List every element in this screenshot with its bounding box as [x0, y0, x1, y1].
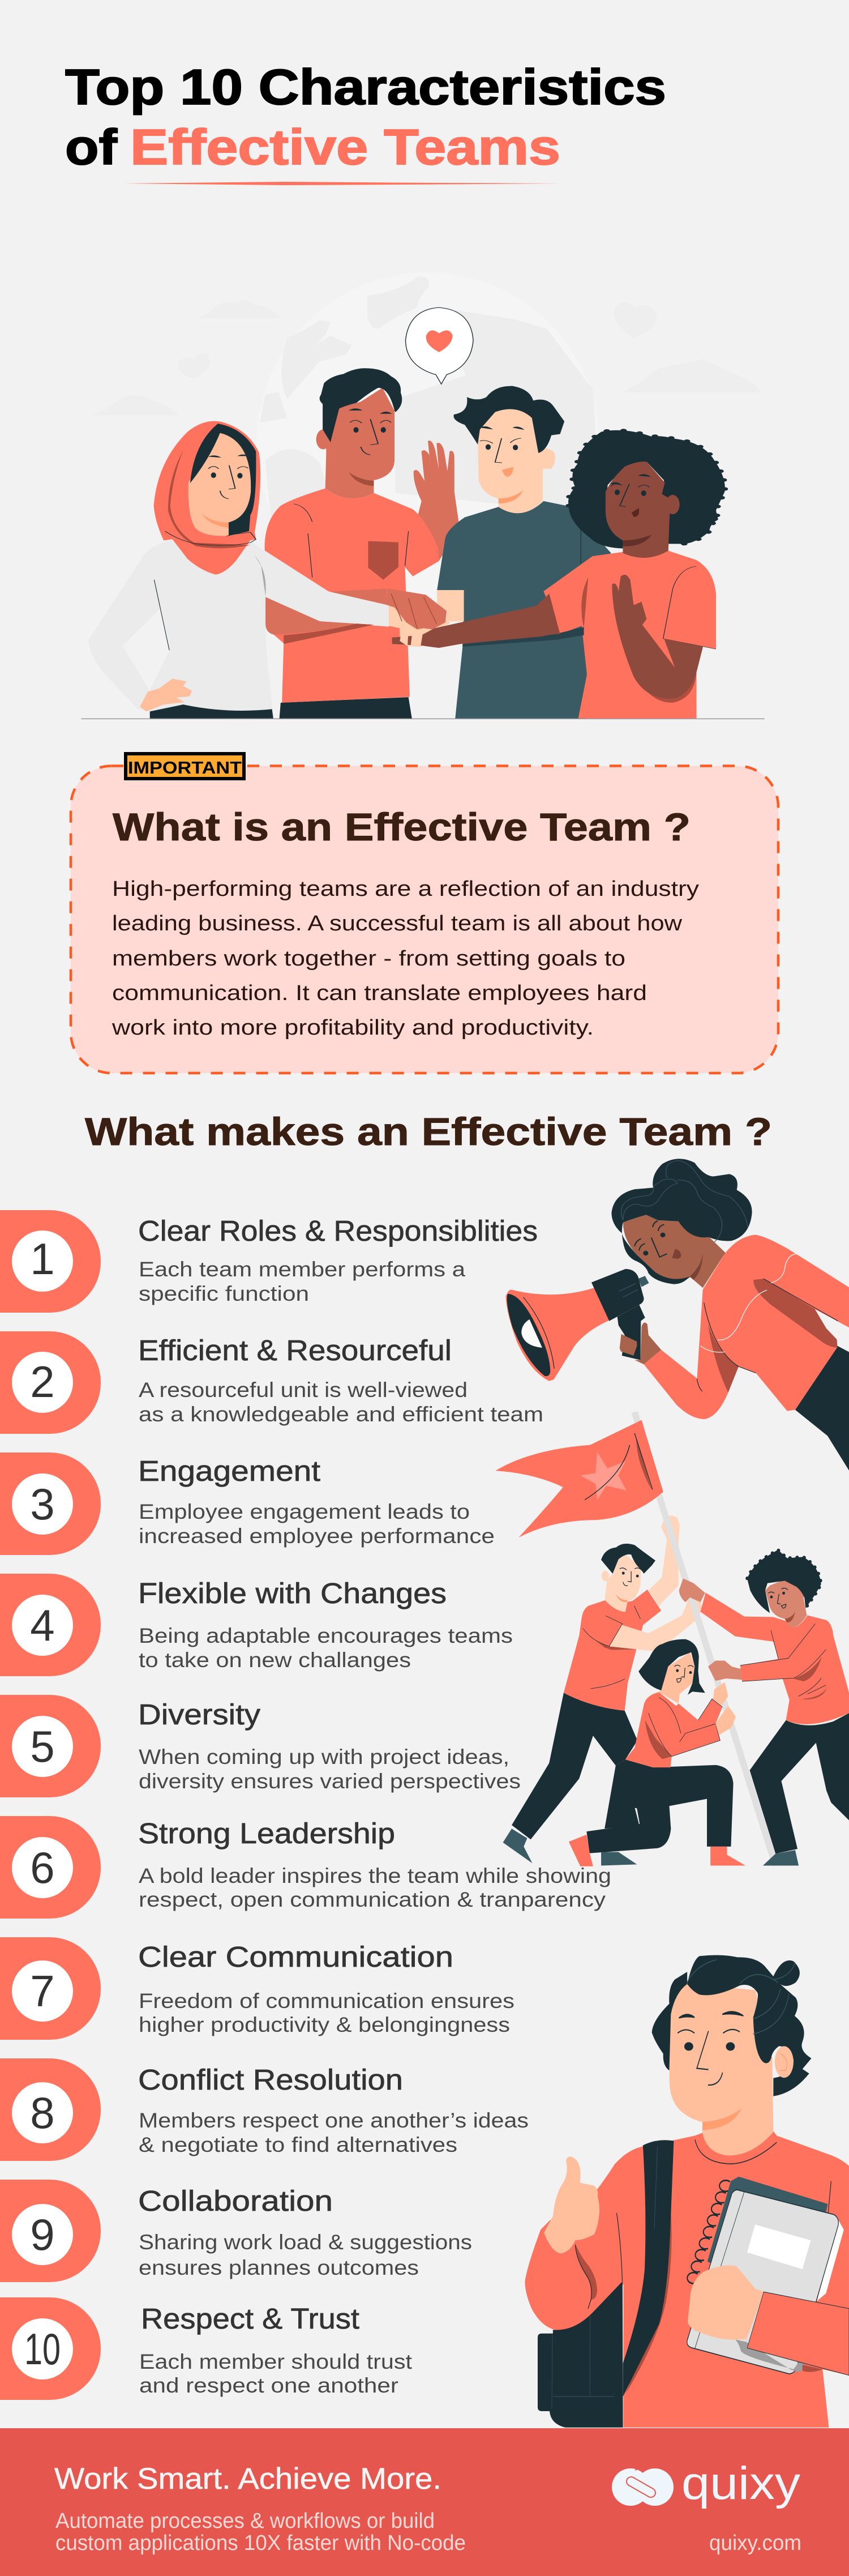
list item 8: Members respect one another’s ideas	[139, 2109, 529, 2132]
title: of	[65, 119, 118, 175]
list item 8	[0, 2058, 529, 2161]
man right	[679, 1550, 849, 1865]
list item 3: increased employee performance	[139, 1524, 495, 1548]
flag pole	[659, 1495, 775, 1865]
footer text	[55, 2509, 466, 2555]
list item 3	[0, 1453, 495, 1555]
footer tagline: Work Smart. Achieve More.	[54, 2462, 441, 2496]
list item 4: Being adaptable encourages teams	[139, 1624, 513, 1647]
person 4: curly hair woman	[462, 430, 725, 719]
badge: important: IMPORTANT	[128, 758, 242, 778]
badge: important	[126, 754, 244, 779]
list item 5: When coming up with project ideas,	[139, 1745, 509, 1768]
list item 5: Diversity	[138, 1698, 261, 1731]
list item 2: 2	[30, 1357, 55, 1407]
panel text: members work together - from setting goals to	[112, 947, 625, 971]
panel text: leading business. A successful team is all about how	[112, 912, 683, 935]
list item 9: Collaboration	[138, 2185, 333, 2217]
list item 10: Respect & Trust	[141, 2302, 359, 2335]
woman kneeling	[569, 1639, 745, 1866]
list item 8: & negotiate to find alternatives	[139, 2133, 457, 2156]
background clouds and hearts	[91, 300, 761, 415]
ground line	[81, 718, 765, 719]
student head and hair	[652, 1955, 812, 2155]
list item 4: to take on new challanges	[139, 1648, 411, 1672]
list item 10: Each member should trust	[139, 2350, 413, 2373]
person 3: teal shirt	[437, 386, 611, 719]
title	[65, 59, 666, 185]
student thumbs up hand	[544, 2156, 599, 2253]
website: quixy.com	[709, 2531, 801, 2555]
illustration: student with thumbs up	[525, 1955, 849, 2428]
list item 9: ensures plannes outcomes	[139, 2256, 419, 2279]
illustration: team raising a flag	[503, 1495, 849, 1866]
panel heading: What is an Effective Team ?	[113, 805, 691, 849]
man left	[503, 1515, 703, 1863]
list item 7: 7	[30, 1966, 55, 2016]
panel text: work into more profitability and productivity.	[112, 1016, 594, 1040]
man left back leg	[604, 1759, 639, 1829]
speech bubble with heart	[405, 307, 473, 384]
list item 4	[0, 1574, 513, 1676]
footer text: custom applications 10X faster with No-code	[55, 2531, 466, 2555]
list item 6	[0, 1816, 611, 1919]
illustration background: globe, clouds, speech bubble	[81, 272, 765, 719]
list item 2: as a knowledgeable and efficient team	[139, 1403, 543, 1426]
list item 5	[0, 1695, 521, 1797]
megaphone	[505, 1269, 661, 1381]
list item 1	[0, 1210, 538, 1313]
hands stacked	[386, 588, 560, 648]
list item 3: Employee engagement leads to	[139, 1500, 470, 1523]
list item 9	[0, 2180, 472, 2282]
list item 10: 10	[24, 2324, 61, 2374]
section heading: What makes an Effective Team ?	[85, 1110, 772, 1154]
quixy logo	[612, 2458, 800, 2509]
globe background	[256, 272, 599, 613]
list item 3: Engagement	[138, 1455, 320, 1487]
list item 8: 8	[30, 2088, 55, 2138]
footer band	[0, 2428, 849, 2576]
list item 5: 5	[30, 1721, 55, 1771]
quixy logo: quixy	[681, 2458, 800, 2509]
list item 6: A bold leader inspires the team while showing	[139, 1864, 611, 1887]
list item 7	[0, 1937, 514, 2040]
list item 1: Clear Roles & Responsiblities	[138, 1215, 538, 1247]
list item 6: respect, open communication & tranparency	[139, 1888, 606, 1911]
list item 1: specific function	[139, 1282, 309, 1305]
list item 5: diversity ensures varied perspectives	[139, 1770, 521, 1793]
list item 8: Conflict Resolution	[138, 2064, 403, 2096]
raised hand of person 4	[612, 575, 703, 703]
list item 10: and respect one another	[139, 2374, 398, 2397]
title: Top 10 Characteristics	[65, 59, 666, 115]
list item 3: 3	[30, 1479, 55, 1529]
list item 10	[0, 2297, 413, 2400]
list item 7: Clear Communication	[138, 1941, 453, 1973]
list item 2	[0, 1331, 543, 1434]
person 2: orange shirt	[265, 368, 458, 719]
illustration: woman with megaphone	[505, 1159, 849, 1471]
list item 6: Strong Leadership	[138, 1817, 395, 1849]
list item 2: Efficient & Resourceful	[138, 1334, 452, 1366]
list item 7: Freedom of communication ensures	[139, 1989, 514, 2013]
list item 6: 6	[30, 1843, 55, 1893]
panel: what is an effective team	[71, 754, 778, 1073]
student notebook	[687, 2177, 849, 2376]
list item 4: Flexible with Changes	[138, 1577, 447, 1609]
list item 9: 9	[30, 2210, 55, 2259]
illustration: team joining hands	[89, 368, 725, 719]
list item 4: 4	[30, 1600, 55, 1650]
flag	[495, 1412, 663, 1537]
panel text	[112, 877, 699, 1040]
footer text: Automate processes & workflows or build	[55, 2509, 435, 2533]
list item 1: Each team member performs a	[139, 1258, 465, 1281]
person 1: woman with headscarf	[89, 421, 389, 719]
list item 7: higher productivity & belongingness	[139, 2013, 510, 2036]
list item 9: Sharing work load & suggestions	[139, 2231, 472, 2254]
list item 2: A resourceful unit is well-viewed	[139, 1378, 468, 1402]
title: Effective Teams	[130, 119, 560, 175]
panel text: communication. It can translate employees hard	[112, 981, 647, 1005]
list item 1: 1	[30, 1234, 55, 1284]
panel text: High-performing teams are a reflection of an industry	[112, 877, 699, 901]
